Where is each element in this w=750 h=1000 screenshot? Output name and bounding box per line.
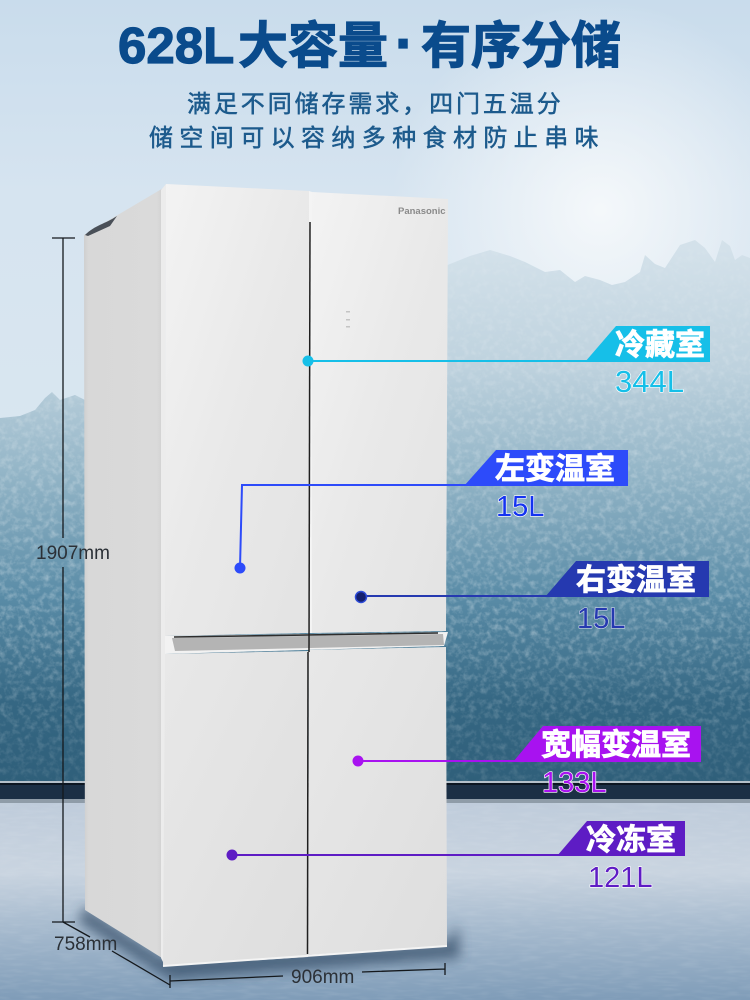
callout: 冷藏室: 冷藏室 — [615, 329, 705, 362]
callout: 冷冻室: 冷冻室 — [586, 824, 676, 857]
front strip — [161, 184, 166, 966]
dimension: depth: 758mm — [54, 934, 117, 955]
callout: 宽幅变温室 — [352, 726, 701, 799]
callout: 右变温室: 右变温室 — [576, 564, 696, 597]
callout: 右变温室 — [356, 561, 709, 635]
door seams — [308, 222, 310, 954]
callout: 左变温室: 15L — [496, 491, 544, 523]
callout: 冷藏室 — [302, 326, 710, 399]
title: 大容量 — [238, 18, 388, 74]
dimension: depth — [54, 922, 170, 985]
bottom edge — [163, 946, 447, 966]
refrigerator — [78, 184, 460, 980]
callout: 右变温室: 15L — [577, 603, 625, 635]
title: 628L — [118, 17, 234, 74]
center strip — [309, 191, 312, 633]
brand logo: Panasonic — [398, 206, 446, 217]
callout: 左变温室 — [234, 450, 628, 574]
lower right door — [308, 647, 447, 955]
subtitle: 满足不同储存需求，四门五温分 — [187, 91, 564, 118]
subtitle: 储空间可以容纳多种食材防止串味 — [149, 125, 605, 152]
dimension: height — [36, 238, 110, 922]
fridge side panel — [84, 187, 165, 966]
dimension: height: 1907mm — [36, 543, 110, 564]
dimension: width — [170, 963, 445, 988]
callout: 宽幅变温室: 宽幅变温室 — [541, 729, 691, 762]
callout: 冷藏室: 344L — [615, 364, 684, 399]
callout: 左变温室: 左变温室 — [495, 453, 615, 486]
upper left door — [165, 184, 309, 636]
callout: 宽幅变温室: 133L — [542, 767, 607, 799]
title: · — [395, 11, 414, 76]
drawer gap — [165, 632, 448, 654]
lower left door — [163, 651, 309, 966]
title: 有序分储 — [421, 18, 621, 74]
dimension: width: 906mm — [291, 967, 354, 988]
callout: 冷冻室 — [226, 821, 685, 894]
fridge floor shadow — [78, 906, 460, 980]
control panel marks — [346, 311, 350, 328]
top hinge — [85, 216, 117, 236]
title — [118, 11, 621, 76]
callout: 冷冻室: 121L — [588, 862, 653, 894]
upper right door — [312, 192, 448, 633]
subtitle — [149, 91, 605, 152]
